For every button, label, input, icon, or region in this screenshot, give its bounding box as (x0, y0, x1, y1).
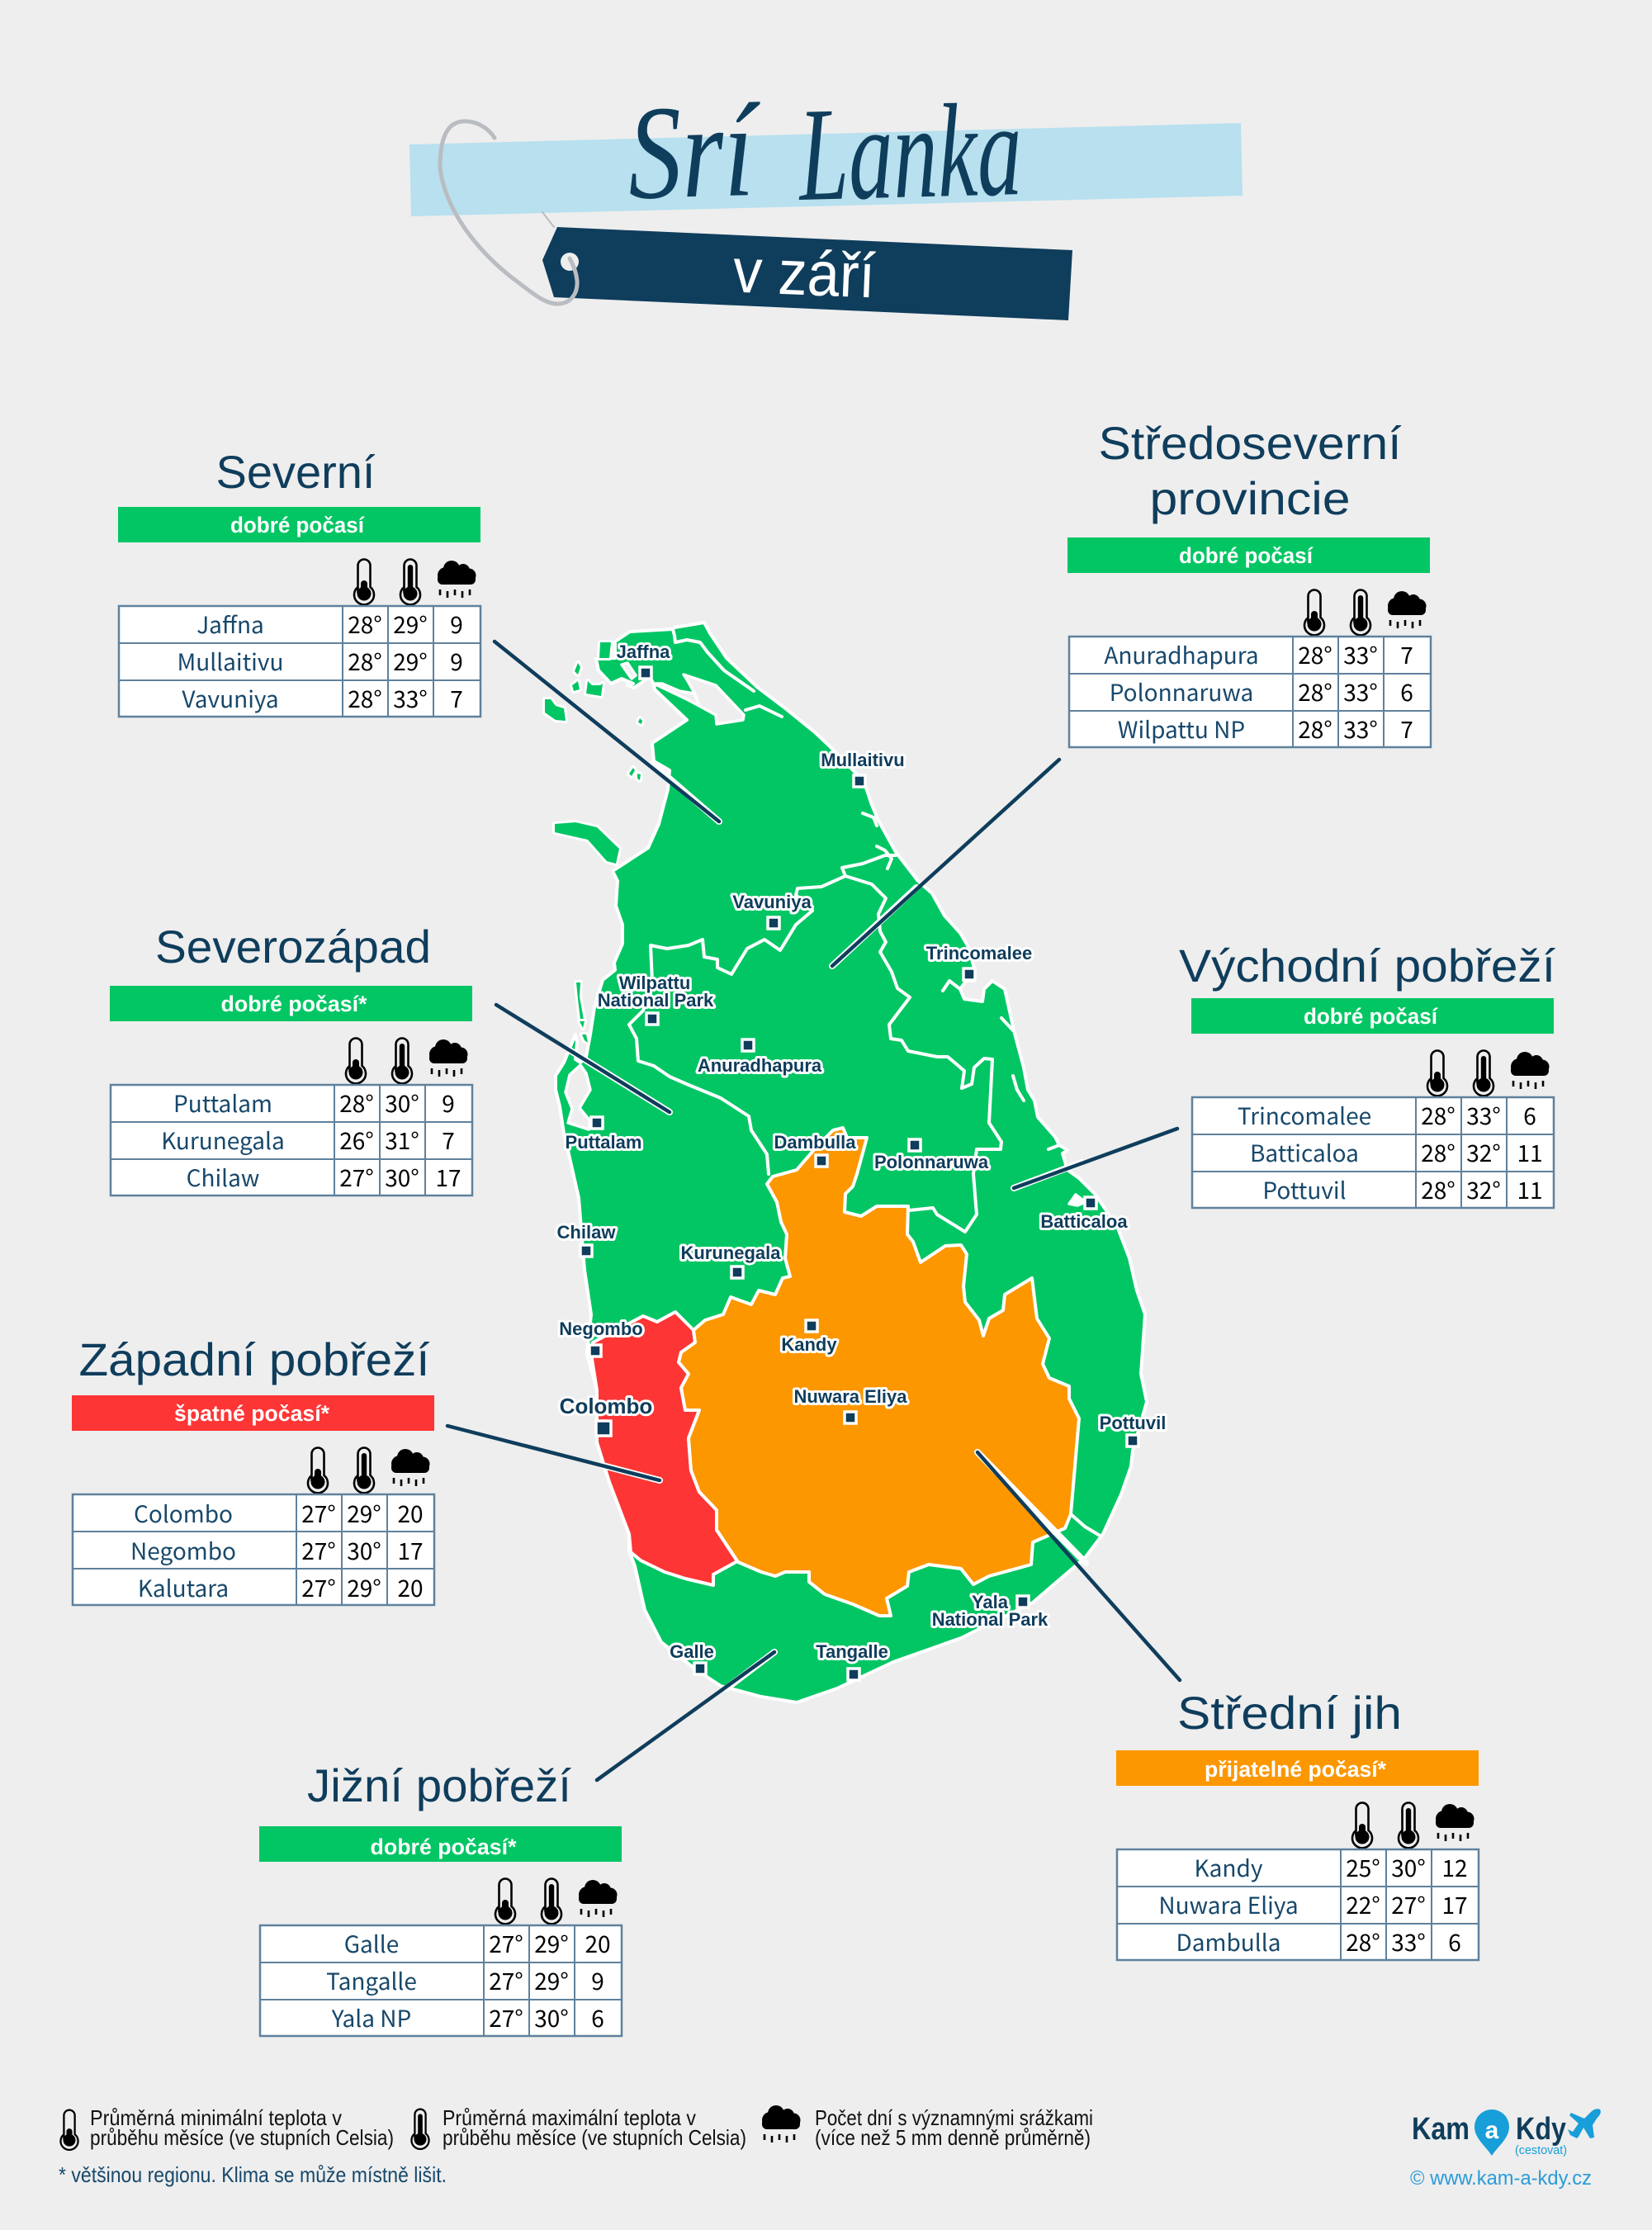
weather table: 28° (1298, 638, 1332, 671)
weather table: Wilpattu NP (1118, 713, 1245, 746)
city: Negombo (559, 1319, 643, 1356)
weather table: Tangalle (326, 1964, 417, 1997)
legend: maximum temperature: průběhu měsíce (ve stupních Celsia) (443, 2125, 746, 2150)
weather table: 29° (393, 608, 428, 641)
weather table: 7 (1400, 638, 1413, 671)
city: Tangalle (816, 1641, 888, 1680)
city: Colombo (560, 1394, 652, 1436)
city: Yala National Park: Yala (972, 1592, 1009, 1612)
weather table: 29° (347, 1571, 381, 1604)
legend: minimum temperature: průběhu měsíce (ve stupních Celsia) (90, 2125, 394, 2150)
table icons (354, 560, 476, 604)
weather table: 6 (1448, 1925, 1461, 1958)
weather table: 33° (393, 682, 428, 715)
status bar (1116, 1750, 1479, 1786)
city: Anuradhapura: Anuradhapura (698, 1055, 822, 1076)
weather table: 22° (1346, 1888, 1380, 1921)
city: Yala National Park (932, 1592, 1048, 1630)
light blue band (409, 123, 1243, 216)
weather table: 29° (534, 1927, 569, 1960)
heading: Východní pobřeží (1179, 940, 1555, 992)
status bar (259, 1826, 622, 1862)
weather table: 27° (489, 2001, 523, 2034)
weather table (119, 606, 480, 717)
logo: Kam a Kdy (1410, 2109, 1601, 2190)
table icons (1352, 1803, 1474, 1848)
weather table: Nuwara Eliya (1158, 1888, 1299, 1921)
city: Batticaloa (1040, 1197, 1128, 1232)
city: Jaffna (617, 642, 670, 679)
map of Sri Lanka (545, 623, 1147, 1702)
weather table: Pottuvil (1262, 1173, 1347, 1206)
weather table: 12 (1441, 1851, 1468, 1884)
title: Srí Lanka: Srí (626, 77, 764, 228)
city: Wilpattu National Park (598, 973, 714, 1025)
lagoons (566, 663, 1086, 1205)
weather table: Puttalam (173, 1087, 272, 1120)
heading: Středoseverní (1098, 417, 1402, 469)
city: Tangalle: Tangalle (816, 1641, 888, 1662)
weather table: Anuradhapura (1104, 638, 1259, 671)
tag: v září: v září (731, 236, 877, 311)
weather table: 28° (1298, 675, 1332, 708)
city: Anuradhapura (698, 1039, 822, 1076)
city: Polonnaruwa (874, 1139, 989, 1172)
weather table: 27° (489, 1927, 523, 1960)
city: Jaffna: Jaffna (617, 642, 670, 662)
leader line: Středoseverní (832, 760, 1059, 966)
city: Batticaloa: Batticaloa (1040, 1211, 1128, 1232)
weather table: Kurunegala (161, 1124, 285, 1157)
island land mass (556, 623, 1147, 1702)
heading: Jižní pobřeží (307, 1759, 571, 1811)
table icons (1427, 1050, 1549, 1096)
legend: maximum temperature: Průměrná maximální teplota v (443, 2105, 696, 2130)
weather table: 7 (442, 1124, 455, 1157)
weather table: 20 (585, 1927, 611, 1960)
weather table: Colombo (134, 1497, 233, 1530)
legend: rainy days: Počet dní s významnými srážkami (815, 2105, 1093, 2130)
weather table: 30° (385, 1161, 419, 1194)
leader line: Severní (495, 642, 719, 821)
heading: provincie (1149, 472, 1351, 524)
city: Negombo: Negombo (559, 1319, 643, 1339)
weather table: 20 (397, 1497, 424, 1530)
weather table: 29° (347, 1497, 381, 1530)
status bar: špatné počasí* (174, 1401, 329, 1426)
city: Trincomalee (926, 943, 1032, 980)
weather table: Trincomalee (1238, 1099, 1371, 1132)
logo wordmark: Kam (1412, 2112, 1470, 2147)
panel: Středoseverní provincie (1067, 417, 1431, 747)
weather table: 28° (348, 608, 382, 641)
weather table: 27° (489, 1964, 523, 1997)
weather table: 32° (1466, 1173, 1501, 1206)
city: Vavuniya (732, 892, 812, 929)
weather table: Yala NP (331, 2001, 411, 2034)
weather table: 9 (442, 1087, 455, 1120)
weather table: Kandy (1195, 1851, 1263, 1884)
weather table: 30° (1391, 1851, 1426, 1884)
weather table: Kalutara (138, 1571, 229, 1604)
city: Wilpattu National Park: Wilpattu (619, 973, 690, 993)
weather table: 17 (435, 1161, 462, 1194)
weather table: 20 (397, 1571, 424, 1604)
city: Pottuvil (1100, 1413, 1166, 1446)
weather table: 28° (348, 645, 382, 678)
weather table: 28° (348, 682, 382, 715)
weather table: 9 (591, 1964, 604, 1997)
legend: maximum temperature (411, 2105, 746, 2150)
weather table (1192, 1097, 1554, 1208)
city: Chilaw: Chilaw (557, 1222, 616, 1243)
status bar: přijatelné počasí* (1205, 1757, 1386, 1782)
weather table: Dambulla (1176, 1925, 1280, 1958)
weather table: 27° (301, 1571, 336, 1604)
icon: map pin: a (1485, 2117, 1499, 2144)
region borders (629, 855, 896, 1174)
icon: plane (1568, 2109, 1601, 2138)
weather table: 11 (1517, 1173, 1543, 1206)
small islands (545, 642, 642, 1043)
table icons (495, 1879, 618, 1924)
status bar: dobré počasí* (370, 1835, 517, 1859)
weather table (73, 1494, 434, 1605)
legend: minimum temperature: Průměrná minimální teplota v (90, 2105, 342, 2130)
weather table: 28° (339, 1087, 374, 1120)
weather table: 33° (1343, 713, 1378, 746)
status bar: dobré počasí (1179, 543, 1314, 568)
weather table: 7 (1400, 713, 1413, 746)
city: Puttalam (566, 1117, 641, 1153)
status bar: dobré počasí (230, 513, 365, 537)
city: Kandy (781, 1320, 837, 1355)
weather table: Vavuniya (182, 682, 279, 715)
website: © www.kam-a-kdy.cz (1410, 2167, 1592, 2190)
city: Nuwara Eliya: Nuwara Eliya (794, 1386, 907, 1407)
panel: Střední jih (1116, 1687, 1479, 1960)
panel: Severní (118, 446, 480, 717)
panel: Západní pobřeží (72, 1333, 434, 1605)
weather table (1117, 1849, 1479, 1960)
leader line: Jižní pobřeží (597, 1652, 774, 1780)
status bar: dobré počasí* (221, 992, 367, 1016)
city: Mullaitivu: Mullaitivu (821, 750, 905, 770)
city: Dambulla (774, 1132, 856, 1167)
heading: Severní (216, 446, 376, 498)
weather table: 33° (1343, 638, 1378, 671)
city: Yala National Park: National Park (932, 1609, 1048, 1630)
weather table: 28° (1421, 1136, 1456, 1169)
status bar (1067, 537, 1430, 573)
weather table: 27° (301, 1497, 336, 1530)
weather table: 27° (301, 1534, 336, 1567)
city: Mullaitivu (821, 750, 905, 787)
logo tagline: (cestovat) (1515, 2143, 1567, 2157)
table icons (1304, 589, 1427, 635)
panel: Jižní pobřeží (259, 1759, 622, 2036)
region: central south (orange) (679, 1128, 1079, 1616)
weather table: 28° (1421, 1099, 1456, 1132)
weather table: 25° (1346, 1851, 1380, 1884)
leader line: Střední jih (977, 1452, 1180, 1680)
weather table: Mullaitivu (178, 645, 283, 678)
city: Galle: Galle (670, 1641, 714, 1662)
weather table: Negombo (130, 1534, 236, 1567)
weather table: Galle (344, 1927, 399, 1960)
weather table: Batticaloa (1250, 1136, 1359, 1169)
weather table: 27° (339, 1161, 374, 1194)
weather table: 33° (1466, 1099, 1501, 1132)
logo wordmark: Kdy (1516, 2112, 1566, 2147)
weather table: Jaffna (196, 608, 264, 641)
weather table: Polonnaruwa (1110, 675, 1253, 708)
weather table (260, 1925, 622, 2036)
city: Galle (670, 1641, 714, 1674)
table icons (346, 1039, 467, 1083)
coast details (673, 629, 1059, 1149)
panel: Severozápad (110, 921, 472, 1195)
city: Polonnaruwa: Polonnaruwa (874, 1152, 989, 1172)
heading (1098, 417, 1402, 524)
icon: map pin (1474, 2109, 1509, 2156)
panel: Východní pobřeží (1179, 940, 1555, 1208)
status bar (72, 1395, 434, 1431)
weather table: 30° (347, 1534, 381, 1567)
city: Kurunegala (680, 1243, 781, 1278)
status bar: dobré počasí (1304, 1004, 1438, 1029)
city: Trincomalee: Trincomalee (926, 943, 1032, 963)
footnote: * většinou regionu. Klima se může místně lišit. (59, 2162, 447, 2187)
weather table: 29° (393, 645, 428, 678)
weather table: 28° (1346, 1925, 1380, 1958)
weather table: Chilaw (187, 1161, 259, 1194)
heading: Severozápad (155, 921, 431, 973)
weather table: 6 (1523, 1099, 1536, 1132)
title: Srí Lanka: Lanka (796, 76, 1024, 230)
legend: rainy days: (více než 5 mm denně průměrně) (815, 2125, 1091, 2150)
city: Chilaw (557, 1222, 616, 1257)
weather table: 28° (1298, 713, 1332, 746)
weather table: 33° (1343, 675, 1378, 708)
weather table: 33° (1391, 1925, 1426, 1958)
city: Colombo: Colombo (560, 1394, 652, 1418)
weather table: 30° (534, 2001, 569, 2034)
leader line: Severozápad (496, 1005, 670, 1112)
weather table: 32° (1466, 1136, 1501, 1169)
heading: Západní pobřeží (79, 1333, 430, 1385)
weather table: 31° (385, 1124, 419, 1157)
city: Dambulla: Dambulla (774, 1132, 856, 1153)
tag string (440, 121, 577, 304)
city: Pottuvil: Pottuvil (1100, 1413, 1166, 1433)
leader line: Západní pobřeží (447, 1426, 660, 1480)
leader line: Východní pobřeží (1014, 1129, 1177, 1188)
city: Nuwara Eliya (794, 1386, 907, 1423)
legend: rainy days (762, 2105, 1093, 2150)
status bar (110, 986, 472, 1021)
weather table: 9 (450, 608, 463, 641)
weather table: 11 (1517, 1136, 1543, 1169)
weather table: 27° (1391, 1888, 1426, 1921)
table icons (308, 1448, 429, 1493)
city: Kurunegala: Kurunegala (680, 1243, 781, 1263)
weather table: 6 (1400, 675, 1413, 708)
weather table: 6 (591, 2001, 604, 2034)
weather table: 29° (534, 1964, 569, 1997)
city: Puttalam: Puttalam (566, 1132, 641, 1153)
weather table: 7 (450, 682, 463, 715)
legend: minimum temperature (60, 2105, 394, 2150)
city: Kandy: Kandy (781, 1334, 837, 1355)
city: Vavuniya: Vavuniya (732, 892, 812, 912)
title: Srí Lanka (626, 76, 1024, 230)
weather table: 30° (385, 1087, 419, 1120)
city markers and labels (557, 642, 1166, 1680)
tag: v září (542, 227, 1072, 320)
weather table (1069, 637, 1431, 747)
weather table: 17 (1441, 1888, 1468, 1921)
weather table: 26° (339, 1124, 374, 1157)
logo wordmark (1412, 2112, 1566, 2147)
legend (59, 2105, 1093, 2187)
weather table: 9 (450, 645, 463, 678)
weather table: 28° (1421, 1173, 1456, 1206)
status bar (1191, 998, 1554, 1034)
weather table (111, 1085, 472, 1195)
region: west coast (red) (591, 1312, 737, 1585)
status bar (118, 507, 480, 542)
title banner (409, 76, 1243, 320)
heading: Střední jih (1177, 1687, 1402, 1739)
city: Wilpattu National Park: National Park (598, 990, 714, 1011)
weather table: 17 (397, 1534, 424, 1567)
